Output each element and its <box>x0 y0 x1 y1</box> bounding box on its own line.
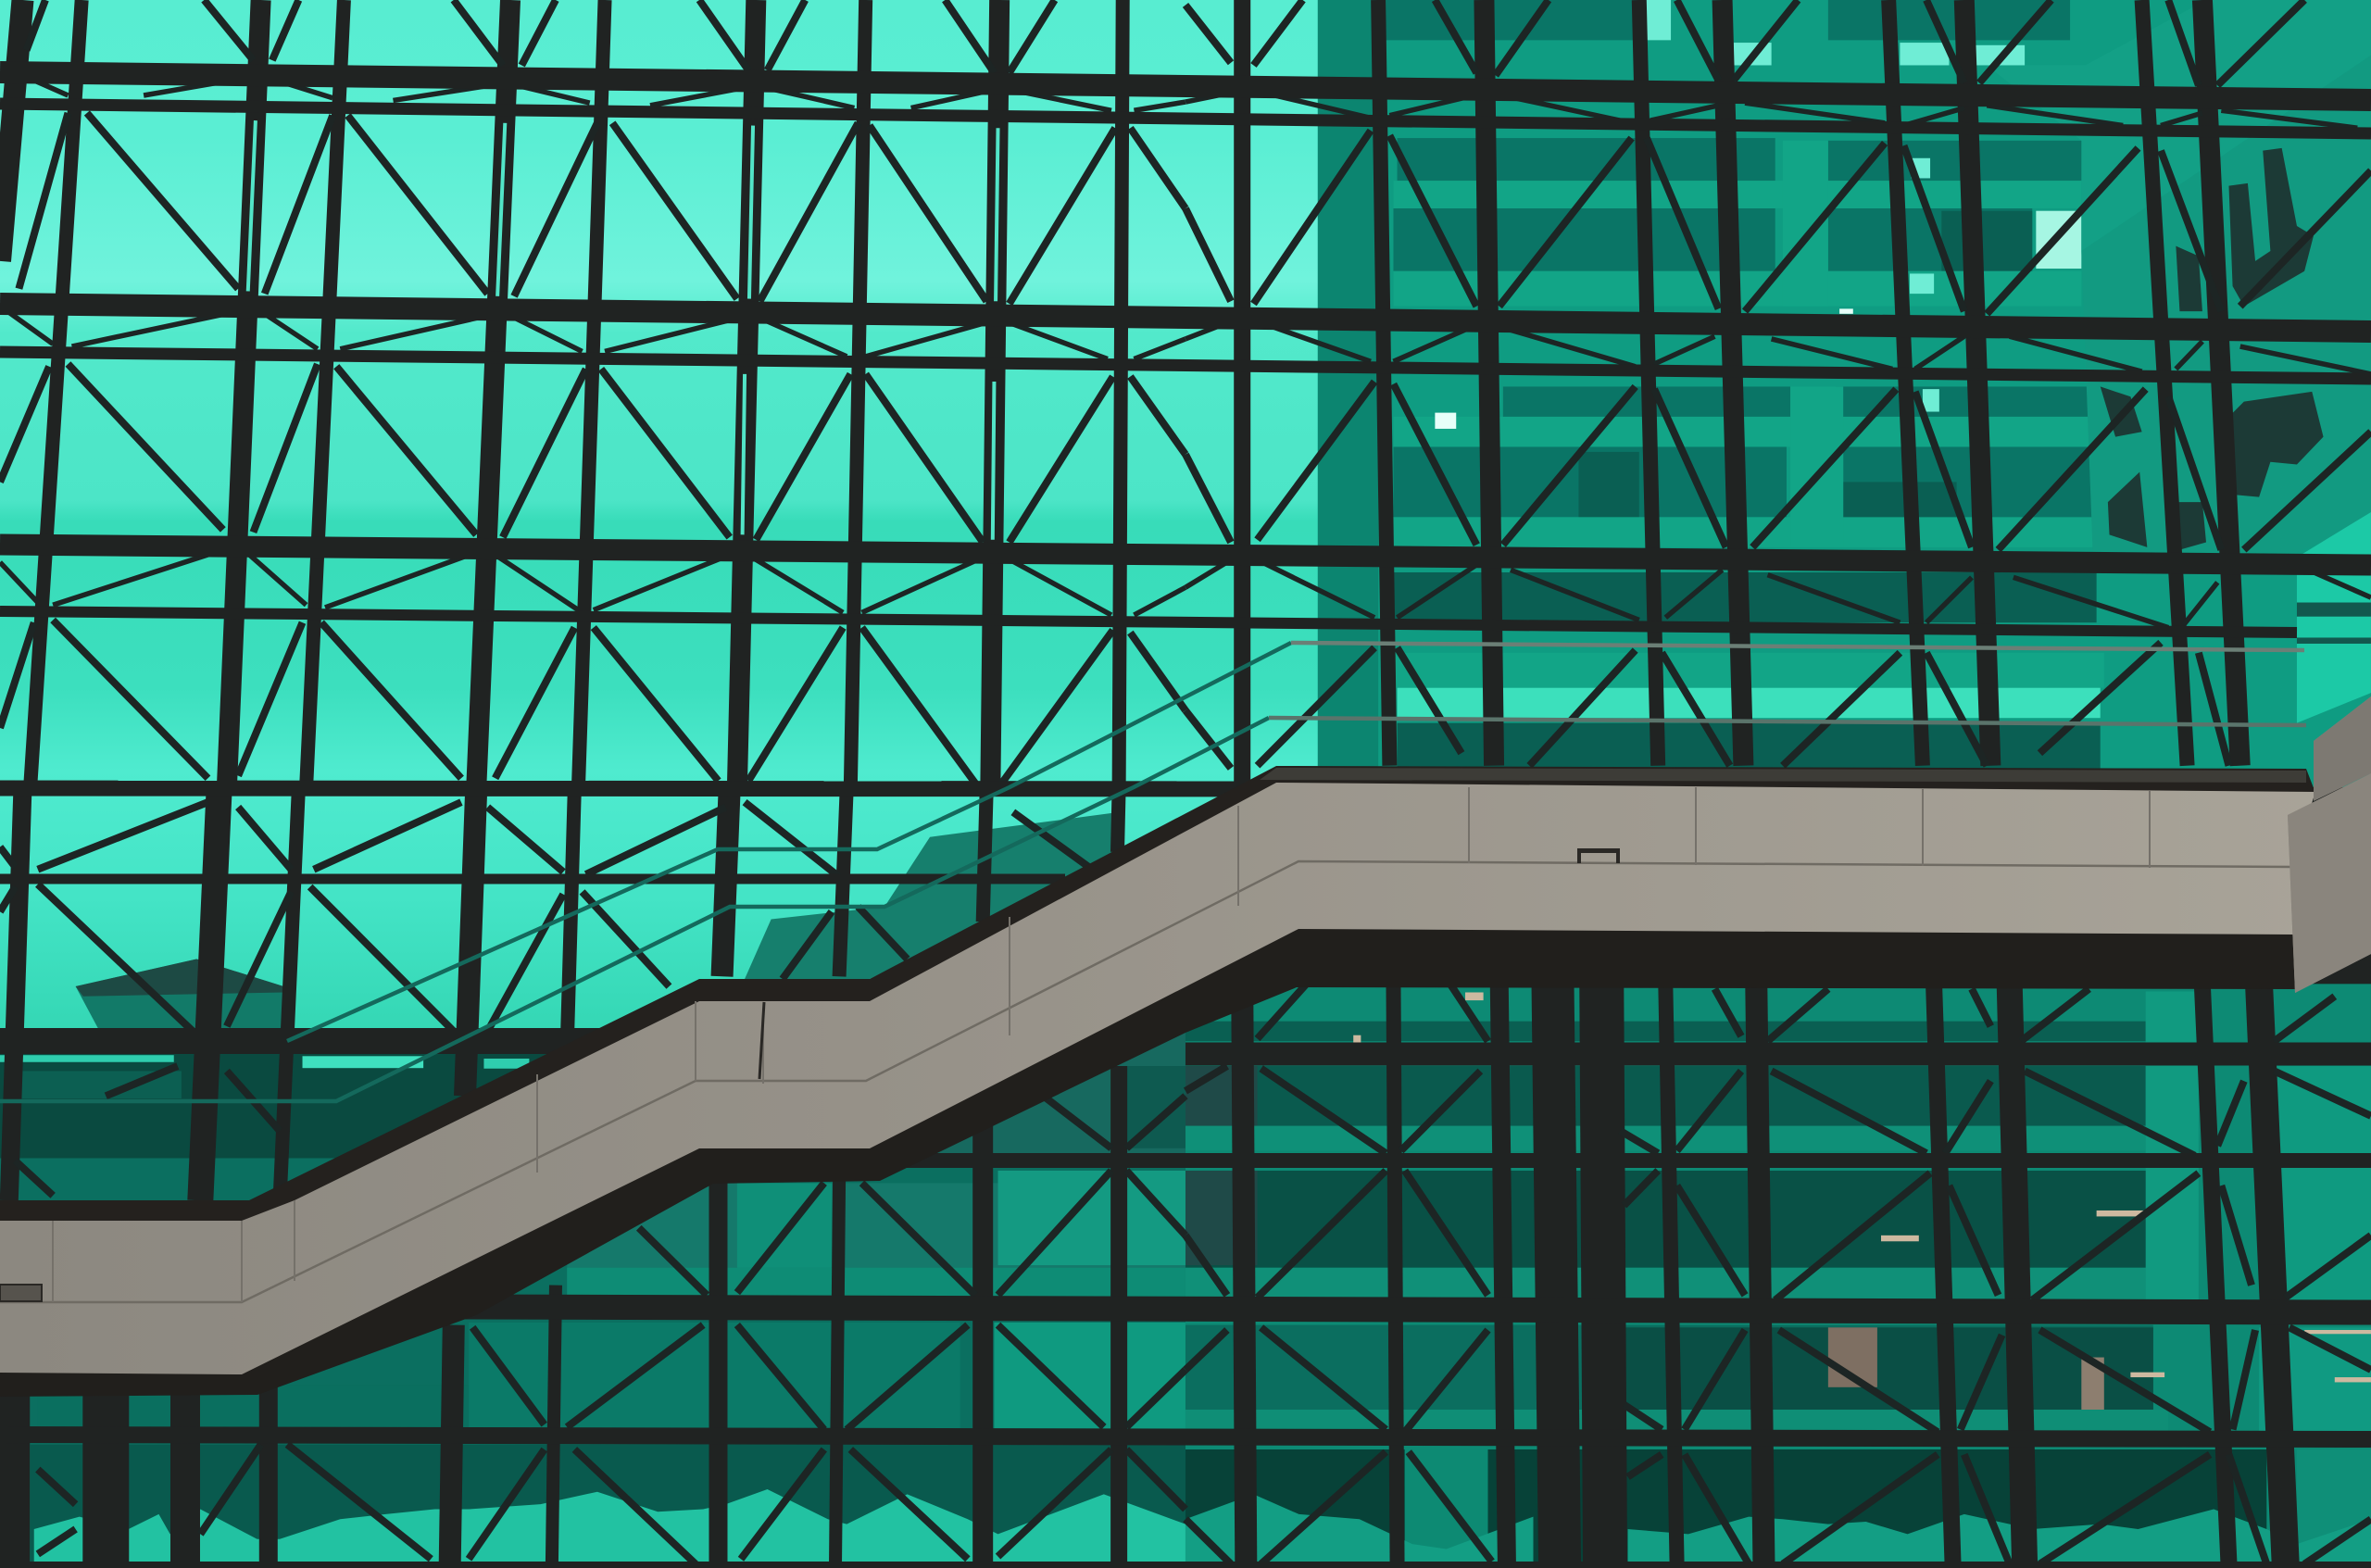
background: lower glass wall, left half <box>0 1159 1186 1568</box>
diagonal braces <box>0 0 1186 784</box>
stair: wall fixture <box>1577 848 1620 863</box>
lower columns and braces, left <box>11 1036 1119 1564</box>
stair: fascia step line <box>0 787 2293 1302</box>
stair: dark underside and support <box>0 926 2295 1397</box>
steel frame: upper left columns and braces <box>0 0 1186 787</box>
column slits <box>248 120 998 540</box>
reflection: building facade with large signage <box>1987 0 2371 552</box>
interior lights <box>1353 992 2371 1410</box>
glass balustrade handrails, right run <box>1269 643 2306 725</box>
stair: dark upper edge and metal capping <box>0 766 2315 1223</box>
main columns <box>0 0 1123 787</box>
reflection: tall building behind stair <box>745 812 1119 979</box>
glass balustrade handrails, left run <box>0 643 1291 1101</box>
reflection: bright slanted glass, far right <box>2297 512 2371 723</box>
background: bright glass wall, upper left <box>0 0 1320 1042</box>
steel frame: upper right columns and braces <box>1186 0 2371 787</box>
reflection: lit ground-floor strip <box>1398 688 2101 718</box>
stair: concrete fascia <box>0 783 2315 1374</box>
stair: landing block at right <box>2288 696 2371 993</box>
stair: small wall box, left <box>0 1285 42 1301</box>
background: darker floor reflections above stair, lower left <box>0 812 1186 1206</box>
glass roof peaks, right <box>1186 1494 2371 1564</box>
reflection: small building on glass <box>76 959 283 1031</box>
steel frame: mid-left columns and braces above stair <box>0 787 1186 1564</box>
background: reflected buildings, upper right <box>1318 0 2371 787</box>
background: lower glass wall, right half <box>1186 984 2371 1568</box>
glass roof peaks, left <box>34 1489 1186 1562</box>
shallow braces <box>0 75 1186 615</box>
steel frame: lower right columns and braces <box>1186 936 2371 1564</box>
reflection: lit windows <box>1435 0 2130 429</box>
